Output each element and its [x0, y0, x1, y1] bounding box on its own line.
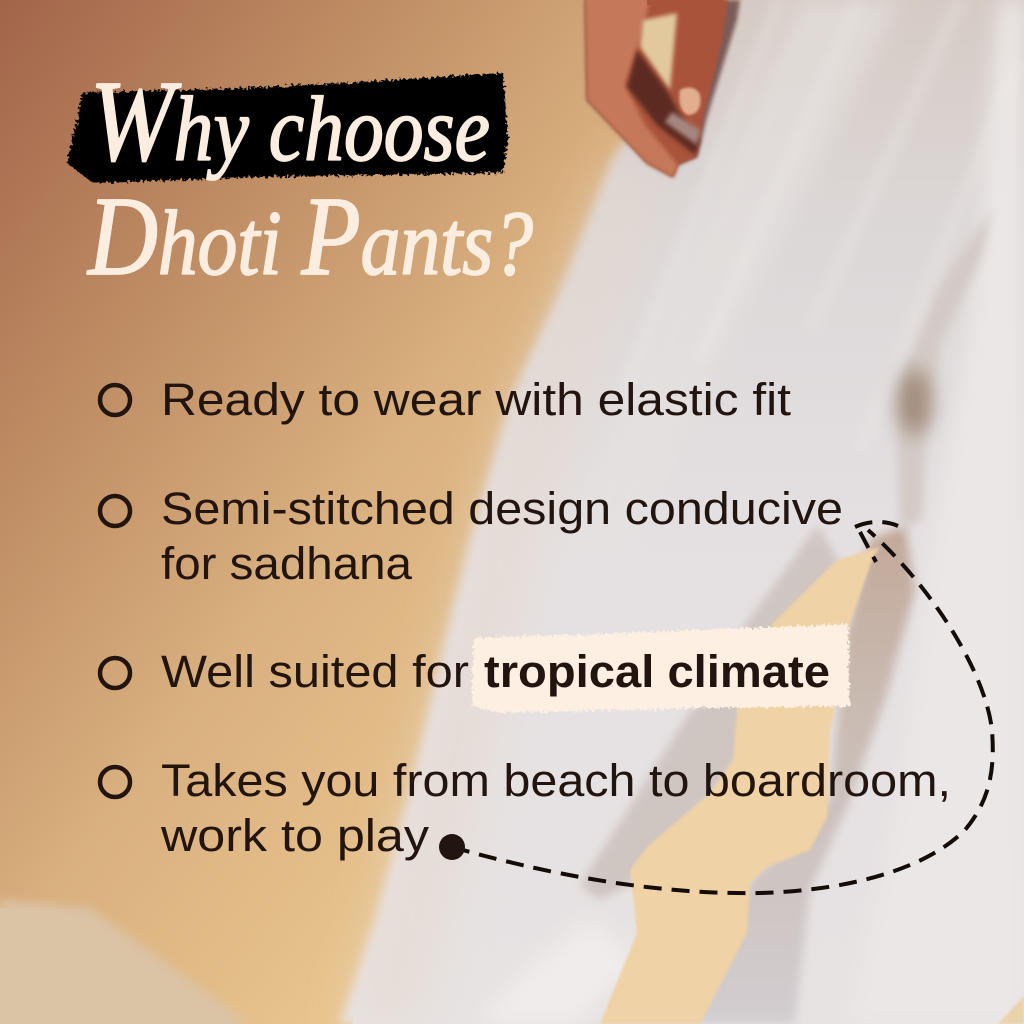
bullet 1: Ready to wear with elastic fit [161, 374, 792, 425]
bullet 3: Well suited for [161, 646, 469, 697]
bullet 2: Semi-stitched design conducive [161, 483, 843, 534]
bullet 2: for sadhana [161, 538, 413, 589]
bullet list [100, 374, 951, 861]
bullet 4 [100, 755, 951, 861]
bullet 4: work to play [160, 810, 430, 861]
bullet 3: tropical climate [484, 646, 830, 697]
background photo: white dhoti pants [340, 0, 1024, 1024]
highlight: tropical climate [472, 624, 850, 713]
arrow start dot [439, 834, 465, 860]
heading: Dhoti Pants? [86, 175, 533, 299]
heading [86, 58, 533, 299]
heading: Why choose [90, 58, 490, 186]
bullet 3 [100, 624, 850, 713]
background photo: hand [585, 0, 740, 177]
dashed arrow [452, 522, 993, 893]
bullet 4: Takes you from beach to boardroom, [161, 755, 951, 806]
heading highlight: black brush stroke [67, 73, 508, 183]
bullet 2 [100, 483, 843, 589]
